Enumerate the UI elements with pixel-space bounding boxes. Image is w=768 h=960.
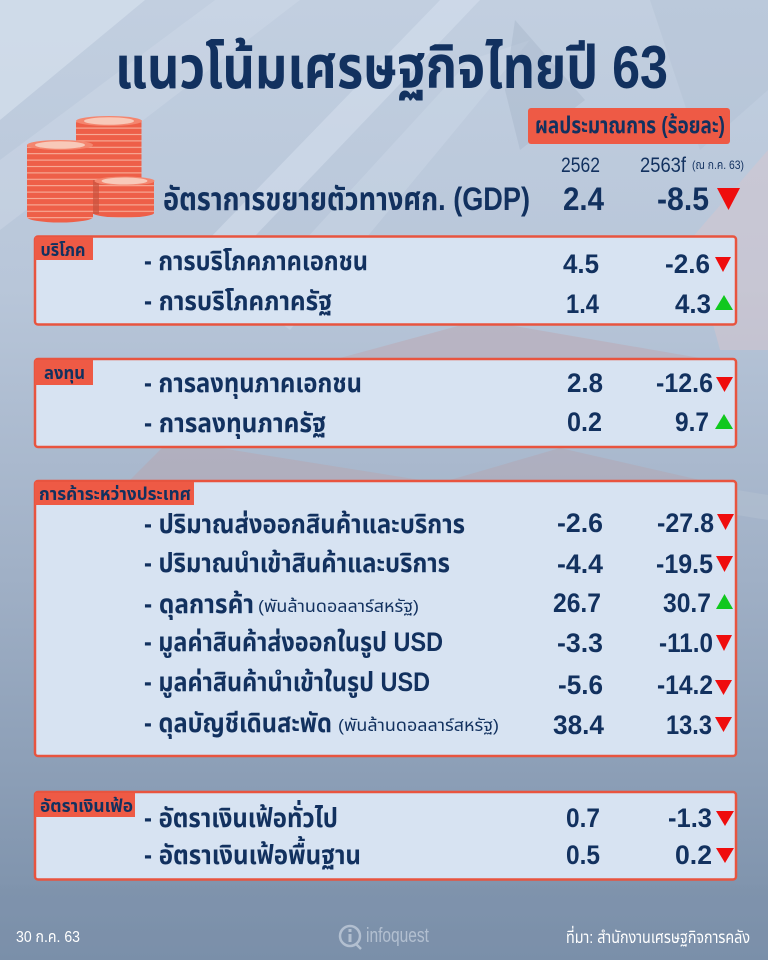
row: public consumption: 4.3 [675, 289, 711, 319]
panel: consumption [35, 236, 736, 324]
row: export volume: - ปริมาณส่งออกสินค้าและบริการ [144, 509, 465, 539]
GDP row: 2.4 [563, 181, 604, 217]
row: import volume [144, 548, 733, 579]
row: public investment: 0.2 [567, 407, 602, 437]
tag: consumption: บริโภค [40, 240, 86, 260]
badge: forecast heading: ผลประมาณการ (ร้อยละ) [535, 112, 725, 138]
icon: coin stacks [27, 116, 154, 223]
row: private consumption [144, 246, 731, 279]
panel: inflation [35, 792, 736, 880]
row: export volume [144, 508, 734, 539]
row: export value USD: -11.0 [659, 628, 713, 658]
row: public investment [144, 407, 733, 439]
row: public consumption: - การบริโภคภาครัฐ [144, 286, 332, 316]
row: export value USD [144, 627, 732, 658]
tag: international trade: การค้าระหว่างประเทศ [39, 484, 191, 504]
date: 30 ก.ค. 63 [16, 929, 80, 946]
tag: investment [35, 360, 93, 385]
row: import value USD: - มูลค่าสินค้านำเข้าในรูป USD [144, 667, 430, 698]
row: headline inflation: -1.3 [668, 803, 712, 833]
row: current account: (พันล้านดอลลาร์สหรัฐ) [338, 715, 499, 735]
row: private investment [144, 368, 733, 399]
row: public investment: - การลงทุนภาครัฐ [144, 408, 326, 439]
tag: inflation: อัตราเงินเฟ้อ [40, 796, 133, 816]
column header: 2563f: 2563f [640, 154, 686, 177]
row: public consumption [144, 286, 733, 319]
row: import volume: -19.5 [656, 549, 713, 579]
row: trade balance: 26.7 [553, 588, 601, 618]
GDP row: อัตราการขยายตัวทางศก. (GDP) [163, 181, 530, 217]
tag: investment: ลงทุน [44, 363, 85, 384]
row: current account [144, 708, 732, 740]
row: core inflation [144, 836, 734, 870]
row: private consumption: 4.5 [563, 249, 599, 279]
row: import value USD [144, 667, 732, 700]
logo: infoquest [340, 925, 429, 949]
row: public investment: 9.7 [675, 407, 709, 437]
column header: 2562: 2562 [561, 154, 600, 177]
row: export value USD: - มูลค่าสินค้าส่งออกในรูป USD [144, 627, 443, 658]
logo: infoquest: infoquest [366, 925, 429, 947]
row: core inflation: 0.5 [566, 840, 600, 870]
panel: investment [35, 359, 736, 447]
row: headline inflation [144, 800, 734, 833]
row: import volume: -4.4 [557, 549, 603, 579]
row: current account: - ดุลบัญชีเดินสะพัด [144, 708, 332, 739]
column header: 2563f: (ณ ก.ค. 63) [692, 158, 744, 172]
row: export value USD: -3.3 [557, 628, 603, 658]
row: private investment: 2.8 [567, 368, 603, 398]
row: headline inflation: - อัตราเงินเฟ้อทั่วไป [144, 800, 338, 833]
row: private consumption: - การบริโภคภาคเอกชน [144, 246, 368, 276]
row: public consumption: 1.4 [566, 289, 599, 319]
row: private investment: - การลงทุนภาคเอกชน [144, 368, 362, 399]
column header: 2563f [640, 154, 744, 177]
row: core inflation: - อัตราเงินเฟ้อพื้นฐาน [144, 836, 361, 870]
row: import value USD: -14.2 [657, 670, 713, 700]
row: core inflation: 0.2 [675, 840, 712, 870]
badge: forecast heading [528, 108, 730, 144]
row: export volume: -27.8 [657, 508, 714, 538]
row: headline inflation: 0.7 [566, 803, 600, 833]
panel: international trade [35, 481, 736, 756]
row: current account: 13.3 [666, 710, 712, 740]
row: current account: 38.4 [553, 710, 604, 740]
row: trade balance: 30.7 [663, 588, 711, 618]
GDP row: -8.5 [657, 181, 709, 217]
row: private investment: -12.6 [656, 368, 713, 398]
row: private consumption: -2.6 [665, 249, 710, 279]
row: import value USD: -5.6 [558, 670, 603, 700]
row: trade balance [144, 588, 733, 620]
row: trade balance: (พันล้านดอลลาร์สหรัฐ) [258, 596, 419, 616]
row: import volume: - ปริมาณนำเข้าสินค้าและบริการ [144, 548, 450, 578]
title: แนวโน้มเศรษฐกิจไทยปี 63 [115, 34, 668, 101]
row: export volume: -2.6 [557, 508, 603, 538]
row: trade balance: - ดุลการค้า [144, 589, 254, 620]
